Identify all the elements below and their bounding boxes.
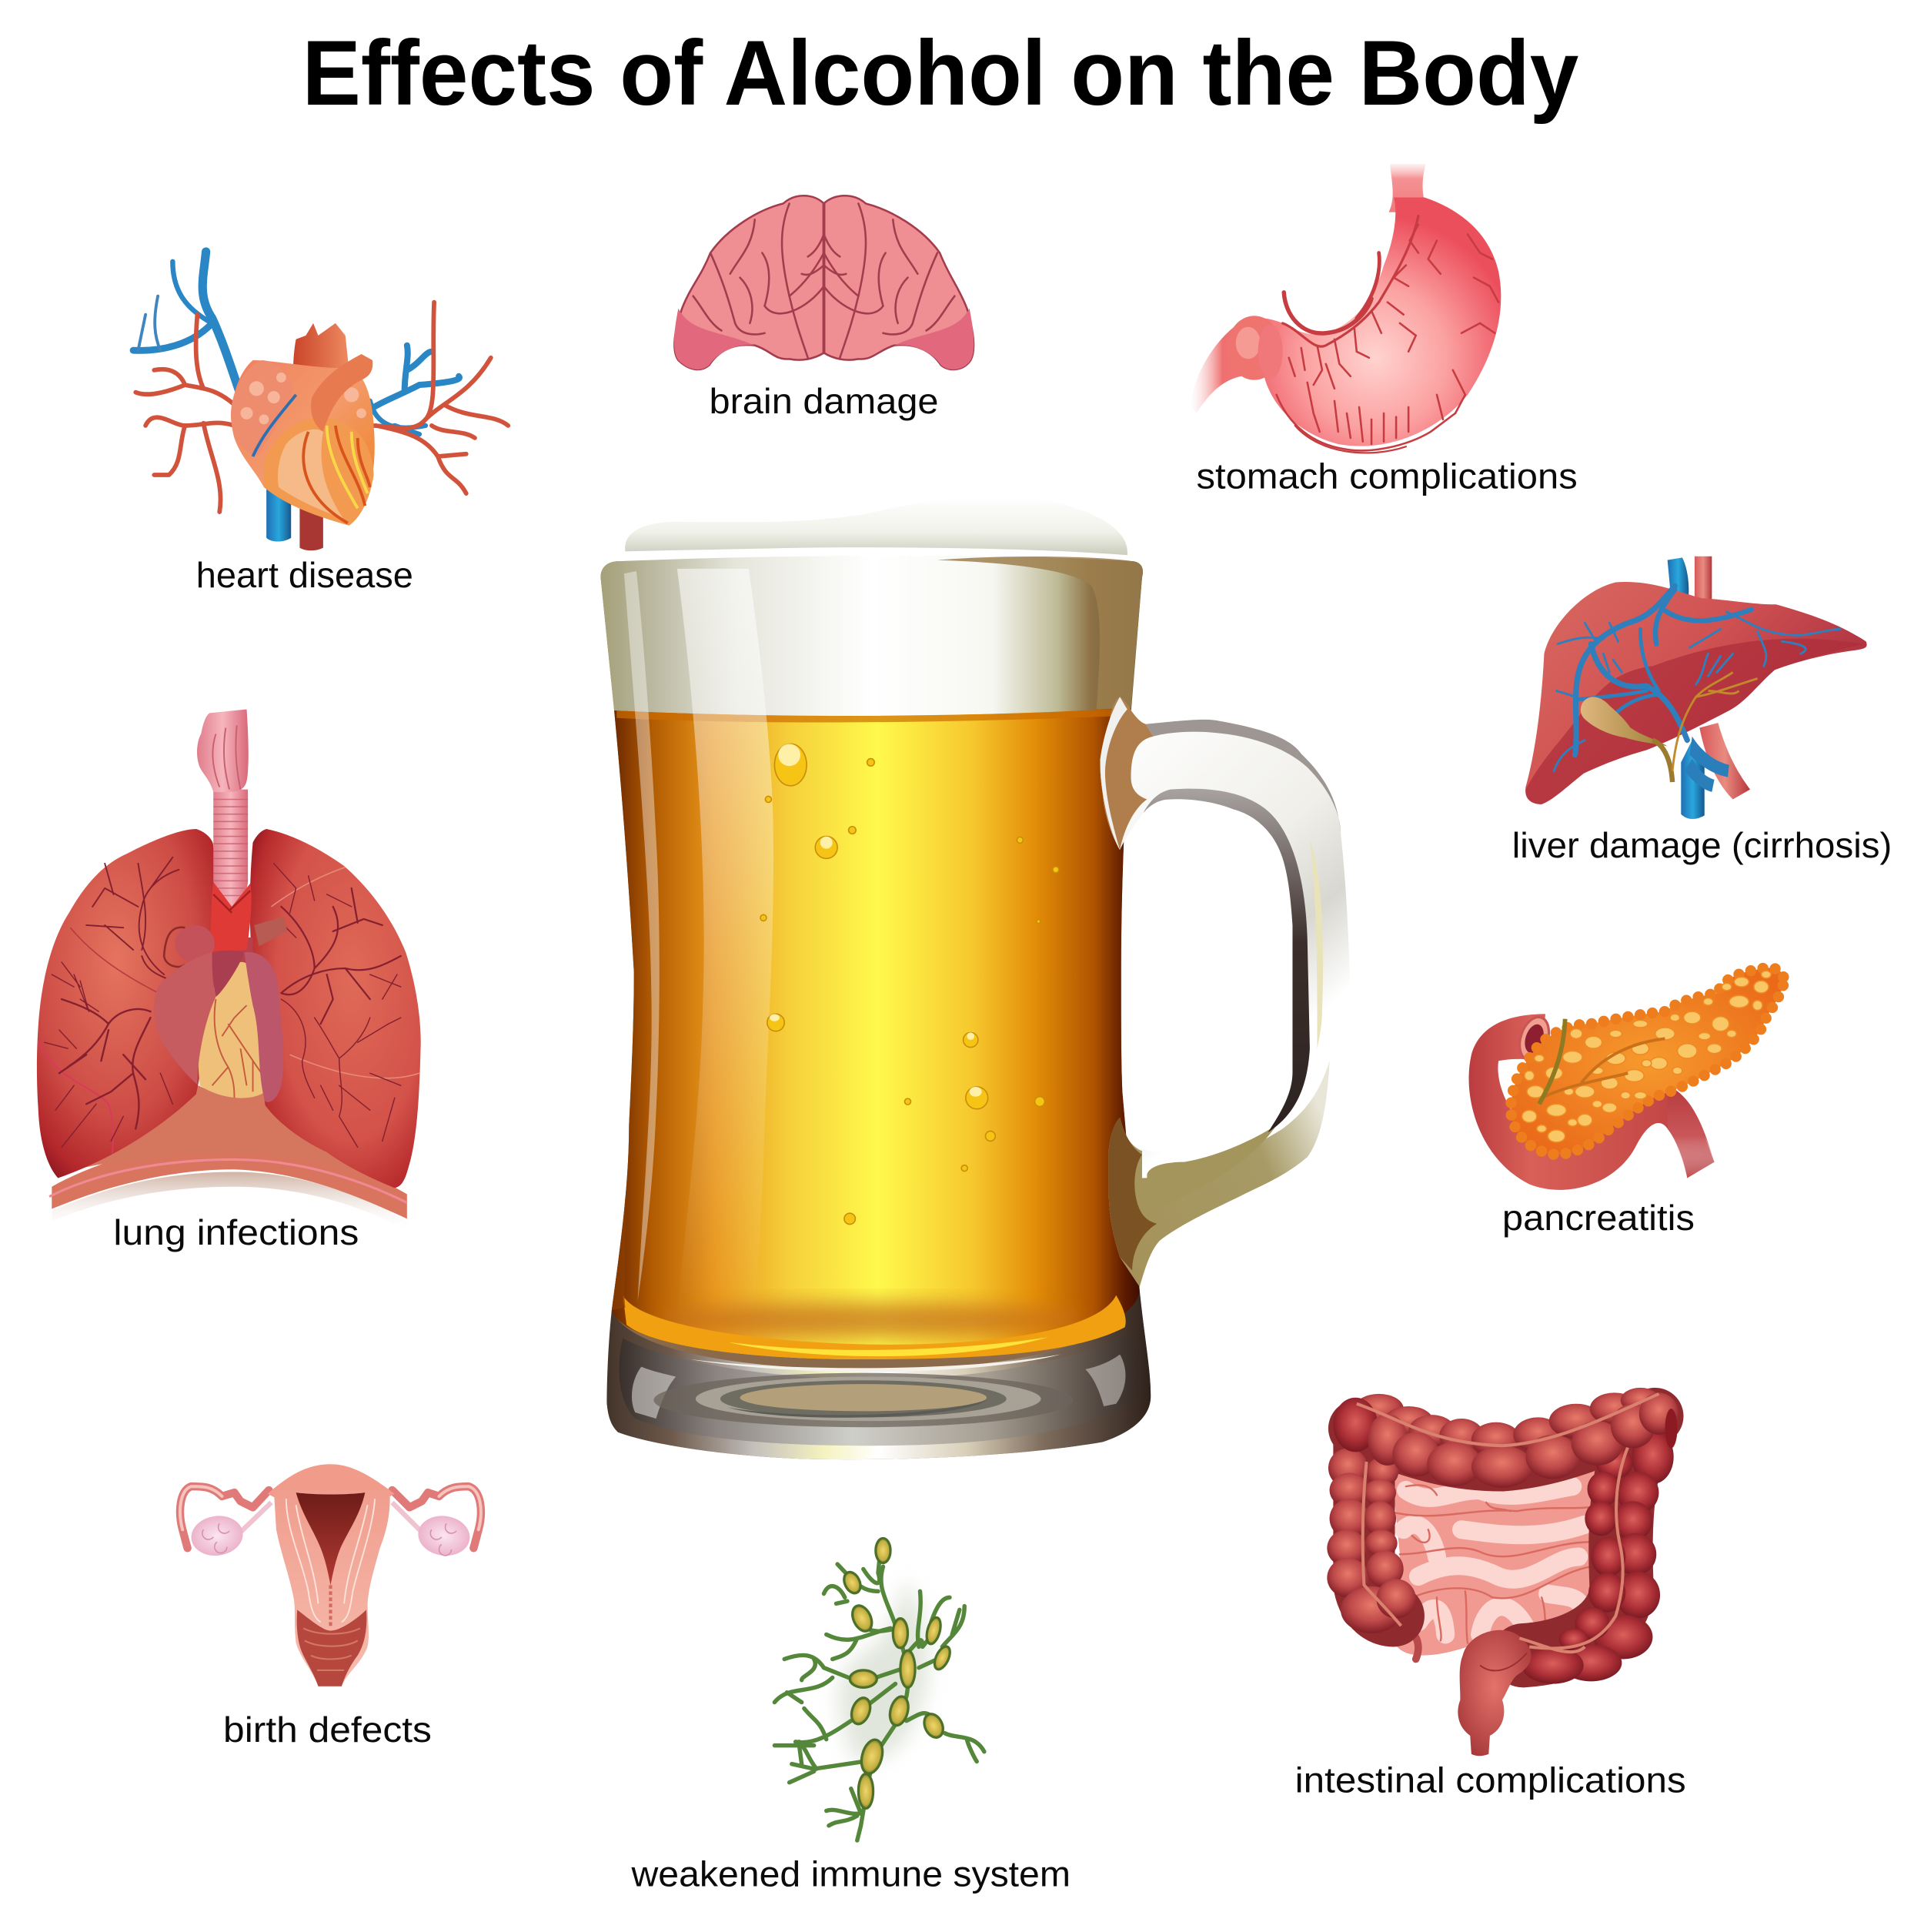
duodenum <box>1469 1014 1715 1190</box>
ascending colon <box>1327 1448 1416 1633</box>
title: Effects of Alcohol on the Body <box>302 22 1578 125</box>
uterus dome <box>268 1464 395 1507</box>
label: intestinal complications: intestinal complications <box>1295 1760 1686 1800</box>
gallbladder <box>1581 672 1758 782</box>
label: stomach complications: stomach complications <box>1196 456 1578 496</box>
left lung <box>37 829 214 1178</box>
glass highlight <box>677 569 773 1322</box>
diaphragm <box>52 1141 407 1218</box>
icon: female reproductive system <box>180 1464 481 1686</box>
foam top <box>625 497 1127 555</box>
left heart lobe <box>154 952 215 1085</box>
liver portal vein <box>1681 740 1705 819</box>
foam in glass <box>600 556 1143 717</box>
fallopian tubes <box>180 1486 481 1548</box>
sigmoid colon and rectum <box>1458 1630 1585 1756</box>
label: weakened immune system: weakened immune system <box>630 1853 1071 1894</box>
heart blue vessels <box>133 252 459 434</box>
heart pulmonary trunk <box>311 354 372 432</box>
lymph vessels <box>774 1548 984 1840</box>
larynx <box>197 710 249 792</box>
beer liquid <box>612 708 1140 1359</box>
icon: pancreas <box>1469 968 1784 1190</box>
icon: stomach <box>1191 164 1501 453</box>
brain lower lobes <box>674 309 974 369</box>
lung fissures <box>38 867 419 1153</box>
mediastinum backing <box>209 938 253 987</box>
icon: lungs <box>37 710 421 1234</box>
pancreas lobules <box>1522 971 1771 1142</box>
heart atrium lobes <box>231 360 293 455</box>
uterus body <box>274 1490 390 1686</box>
lymph nodes <box>841 1538 953 1808</box>
label: birth defects: birth defects <box>223 1710 432 1750</box>
liver blue veins <box>1554 586 1840 771</box>
mug glass body <box>600 561 1151 1459</box>
liver vessels behind <box>1695 557 1712 604</box>
label: brain damage: brain damage <box>709 381 939 421</box>
stomach vessels <box>1277 216 1498 453</box>
icon: beer mug <box>600 497 1351 1459</box>
beer bubbles <box>760 744 1059 1225</box>
handle outer grey rim <box>1146 720 1341 833</box>
beer bottom glow <box>661 1302 1081 1337</box>
windpipe <box>213 790 248 907</box>
heart muscle yellow <box>199 962 266 1098</box>
heart ventricles <box>232 360 375 526</box>
label: liver damage (cirrhosis): liver damage (cirrhosis) <box>1512 825 1892 865</box>
uterus cavity <box>296 1492 365 1585</box>
heart red vessels <box>135 303 508 512</box>
icon: brain <box>674 196 974 369</box>
colon underlay <box>1357 1416 1655 1656</box>
appendix <box>1406 1628 1418 1659</box>
label: lung infections: lung infections <box>113 1212 359 1252</box>
label: heart disease: heart disease <box>196 555 413 595</box>
descending colon <box>1522 1429 1674 1684</box>
icon: lymph nodes <box>774 1538 984 1840</box>
transverse colon <box>1333 1388 1678 1488</box>
brain folds <box>693 203 954 358</box>
lymph soft shadow <box>839 1579 928 1762</box>
mediastinal vessels <box>211 882 252 952</box>
heart lower great vessels <box>266 487 291 542</box>
small intestine <box>1388 1468 1603 1656</box>
icon: liver <box>1525 557 1867 819</box>
icon: intestines <box>1327 1388 1678 1756</box>
icon: heart <box>133 252 508 550</box>
heart aorta <box>293 323 349 419</box>
mug handle <box>1100 697 1351 1287</box>
liver lobes <box>1525 582 1867 804</box>
mug base <box>606 1290 1151 1459</box>
handle top brown lug <box>1100 697 1153 850</box>
right heart lobe <box>244 952 283 1102</box>
pancreatic ducts <box>1542 1038 1665 1098</box>
lung bronchi branches <box>45 857 401 1147</box>
label: pancreatitis: pancreatitis <box>1502 1198 1695 1238</box>
handle inner dark edge <box>1144 789 1310 1132</box>
right lung <box>250 829 421 1188</box>
pancreas body <box>1511 968 1784 1155</box>
vagina canal <box>297 1609 366 1686</box>
handle lower olive band <box>1109 1061 1330 1287</box>
ovaries <box>189 1513 246 1559</box>
